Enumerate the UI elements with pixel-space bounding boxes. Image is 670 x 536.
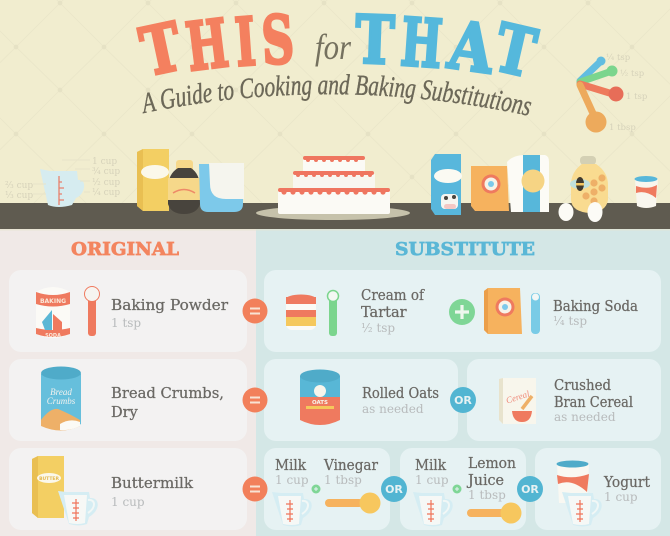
amount: 1 tbsp	[468, 488, 506, 502]
or badge: row 2: OR	[454, 394, 472, 407]
icon: oats can	[300, 370, 340, 425]
label line 2: Juice	[466, 473, 504, 489]
icon: orange spoon	[84, 286, 100, 336]
title: T	[354, 0, 396, 80]
icon: measuring cup with labels	[5, 157, 120, 207]
card: buttermilk	[9, 448, 247, 530]
icon: baking soda box	[484, 288, 522, 334]
icon: baking soda box	[471, 166, 509, 211]
amount: ¼ tsp	[553, 314, 587, 328]
amount: ½ tsp	[361, 321, 395, 335]
icon: jar	[168, 160, 200, 214]
measuring spoons diagram: ¼ tsp	[606, 52, 631, 63]
icon: cake	[256, 156, 410, 220]
label: Cream of	[361, 288, 426, 304]
icon: yogurt cup	[634, 176, 658, 208]
amount: 1 tbsp	[324, 473, 362, 487]
card: milk and lemon juice	[400, 448, 526, 530]
label: Buttermilk	[111, 476, 193, 492]
label: Milk	[275, 458, 306, 474]
or badge: row 2	[450, 387, 476, 413]
card: milk and vinegar	[264, 448, 390, 530]
card: rolled oats	[264, 359, 458, 441]
label: Yogurt	[603, 475, 650, 491]
label: Baking Soda	[553, 299, 638, 315]
icon: baking soda tin: BAKING	[40, 298, 66, 305]
icon: cereal box	[499, 378, 536, 424]
icon: measuring cup	[58, 491, 98, 526]
plus sign	[449, 299, 475, 325]
amount: 1 cup	[111, 495, 145, 509]
icon: milk carton	[431, 154, 462, 215]
icon: baking soda tin: SODA	[45, 333, 61, 339]
or badge: row 3 left: OR	[385, 483, 403, 496]
icon: cereal box: Cereal	[505, 388, 531, 406]
title: H	[182, 4, 232, 86]
icon: measuring cup	[413, 492, 453, 526]
label line 2: Bran Cereal	[554, 395, 633, 411]
card: crushed bran cereal	[467, 359, 661, 441]
icon: green spoon	[328, 290, 338, 336]
amount: 1 cup	[275, 473, 309, 487]
label: Crushed	[554, 378, 611, 394]
icon: measuring cup	[562, 492, 602, 526]
plus sign	[452, 484, 462, 494]
label: Rolled Oats	[362, 386, 439, 402]
icon: blue spoon	[531, 293, 540, 334]
or badge: row 3 left	[381, 476, 407, 502]
icon: bread crumbs can	[41, 366, 81, 430]
equals badge 3	[242, 476, 268, 502]
or badge: row 3 right: OR	[521, 483, 539, 496]
amount: as needed	[362, 402, 424, 416]
icon: measuring cup with labels: ¼ cup	[92, 187, 120, 198]
plus sign	[312, 484, 320, 494]
icon: measuring cup with labels: ⅔ cup	[5, 181, 33, 191]
header background	[0, 0, 670, 203]
title	[134, 0, 543, 93]
card: baking powder	[9, 270, 247, 352]
icon: butter carton	[137, 149, 169, 211]
measuring spoons diagram: 1 tsp	[626, 92, 648, 102]
label: Vinegar	[323, 458, 378, 474]
icon: measuring cup with labels: ⅓ cup	[5, 191, 33, 201]
icon: flour bag	[507, 155, 549, 212]
icon: cream of tartar jar	[286, 294, 316, 330]
amount: as needed	[554, 410, 616, 424]
title: T	[487, 8, 543, 93]
icon: glass	[199, 163, 244, 212]
panel: original	[0, 229, 256, 536]
icon: bread crumbs can: Crumbs	[47, 396, 76, 406]
icon: measuring cup with labels: ¾ cup	[92, 166, 120, 177]
heading: substitute: SUBSTITUTE	[395, 239, 535, 260]
card: bread crumbs	[9, 359, 247, 441]
label: Baking Powder	[111, 298, 228, 314]
title: H	[398, 3, 445, 83]
label: Lemon	[468, 456, 516, 472]
equals badge 1	[242, 298, 268, 324]
icon: honey jar	[570, 156, 608, 213]
icon: eggs	[558, 202, 602, 222]
card: cream of tartar + baking soda	[264, 270, 661, 352]
title: I	[233, 2, 258, 82]
amount: 1 cup	[415, 473, 449, 487]
heading: original: ORIGINAL	[71, 239, 179, 260]
icon: bread crumbs can: Bread	[50, 387, 72, 397]
title: S	[260, 0, 296, 80]
amount: 1 tsp	[111, 316, 141, 330]
icon: tablespoon	[467, 502, 522, 524]
equals badge 2	[242, 388, 268, 412]
icon: butter carton: BUTTER	[39, 476, 59, 482]
icon: baking soda tin	[36, 287, 70, 339]
title: A	[443, 5, 499, 89]
title: for	[315, 27, 352, 67]
icon: yogurt tub	[556, 460, 589, 503]
measuring spoons diagram: ½ tsp	[620, 68, 645, 79]
measuring spoons diagram: 1 tbsp	[609, 123, 636, 133]
amount: 1 cup	[604, 490, 638, 504]
icon: tablespoon	[325, 492, 380, 514]
icon: butter carton	[32, 456, 64, 518]
label line 2: Dry	[111, 405, 139, 421]
icon: oats can: OATS	[312, 400, 328, 406]
icon: measuring cup	[272, 492, 312, 526]
label line 2: Tartar	[361, 305, 407, 321]
label: Bread Crumbs,	[111, 386, 224, 402]
icon: measuring cup with labels: 1 cup	[92, 157, 117, 167]
card: yogurt	[535, 448, 661, 530]
measuring spoons diagram	[580, 52, 648, 133]
icon: measuring cup with labels: ½ cup	[92, 177, 120, 188]
or badge: row 3 right	[517, 476, 543, 502]
counter	[0, 203, 670, 229]
subtitle: A Guide to Cooking and Baking Substitutions	[142, 74, 532, 116]
label: Milk	[415, 458, 446, 474]
title: T	[134, 7, 188, 92]
